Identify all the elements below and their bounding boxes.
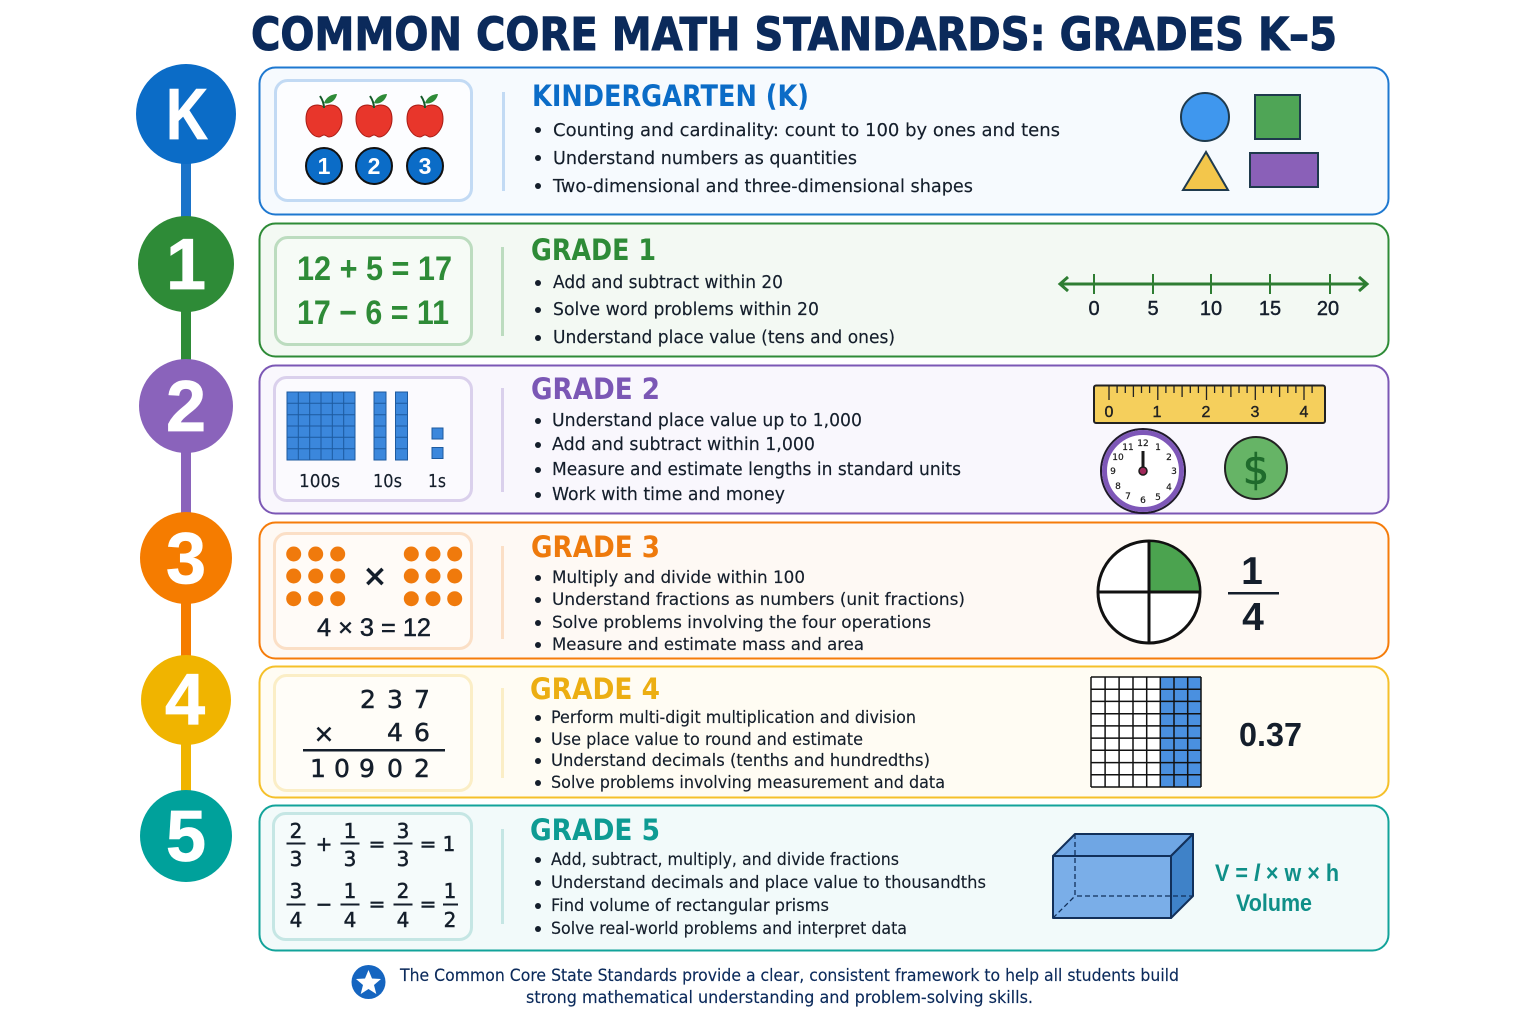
bullet list: Counting and cardinality: count to 100 by ones and tens: [553, 120, 1060, 141]
number line: [1060, 274, 1367, 320]
activity box: long multiplication: ×: [314, 719, 334, 748]
panel: kindergarten: [260, 68, 1388, 214]
activity box: fraction equations: =: [369, 832, 385, 856]
badge: 3: 3: [166, 519, 206, 599]
bullet list: Understand place value (tens and ones): [553, 327, 895, 348]
icon: ruler: 2: [1202, 404, 1211, 421]
badge: 1: 1: [166, 225, 206, 305]
badge: K: [136, 64, 236, 164]
activity box: long multiplication: 7: [414, 685, 430, 714]
activity box: fraction equations: =: [369, 892, 385, 916]
activity box: fraction equations: 1: [444, 879, 456, 903]
activity box: apples and counters: 2: [368, 153, 380, 179]
bullet list: Solve word problems within 20: [553, 299, 819, 320]
volume formula: V = l × w × h: [1215, 860, 1339, 887]
bullet list: Understand decimals and place value to thousandths: [551, 873, 986, 893]
activity box: arrays: [274, 534, 472, 648]
icon: clock: 8: [1115, 482, 1121, 492]
activity box: fraction equations: 3: [344, 847, 356, 871]
activity box: long multiplication: 9: [359, 754, 375, 783]
badge: 5: 5: [166, 797, 206, 877]
activity box: long multiplication: [274, 676, 472, 790]
icon: clock: 2: [1166, 453, 1172, 463]
badge: 2: [139, 359, 233, 453]
footer note: strong mathematical understanding and problem-solving skills.: [526, 988, 1033, 1008]
bullet list: Understand decimals (tenths and hundredths): [551, 751, 930, 771]
badge: K: K: [166, 75, 208, 155]
activity box: fraction equations: 3: [397, 847, 409, 871]
activity box: fraction equations: =: [420, 892, 436, 916]
activity box: long multiplication: 2: [360, 685, 376, 714]
panel: grade 1: [260, 224, 1388, 356]
decimal grid: [1091, 677, 1201, 787]
panel: grade 4: [260, 666, 1388, 798]
bullet list: [535, 410, 961, 505]
heading: GRADE 1: [531, 233, 656, 267]
icon: clock: 11: [1122, 443, 1134, 453]
bullet list: Use place value to round and estimate: [551, 730, 863, 750]
heading: GRADE 5: [530, 813, 660, 847]
bullet list: Solve problems involving the four operations: [552, 613, 931, 633]
icon: dollar coin: [1225, 437, 1287, 499]
heading: GRADE 2: [531, 372, 660, 406]
icon: clock: [1101, 429, 1185, 513]
fraction circle: [1098, 541, 1200, 643]
panel: grade 2: [260, 366, 1388, 514]
icon: dollar coin: $: [1243, 445, 1269, 494]
icon: clock: 12: [1137, 439, 1149, 449]
icon: clock: 5: [1155, 493, 1161, 503]
bullet list: Solve problems involving measurement and data: [551, 773, 945, 793]
panel: grade 3: [260, 522, 1388, 658]
bullet list: [535, 272, 895, 348]
icon: clock: 9: [1110, 467, 1116, 477]
bullet list: Add and subtract within 20: [553, 272, 783, 293]
number line: 5: [1147, 298, 1159, 320]
activity box: base ten blocks: [274, 378, 472, 500]
bullet list: [535, 850, 986, 939]
footer note: The Common Core State Standards provide a clear, consistent framework to help all students build: [399, 966, 1179, 986]
activity box: fraction equations: 2: [397, 879, 409, 903]
activity box: fraction equations: 3: [397, 819, 409, 843]
activity box: fraction equations: −: [316, 892, 332, 916]
badge: 4: [141, 655, 231, 745]
activity box: fraction equations: [274, 814, 472, 940]
number line: 0: [1088, 298, 1100, 320]
badge: 1: [138, 216, 234, 312]
icon: ruler: 4: [1300, 404, 1309, 421]
icon: star badge: [352, 965, 386, 999]
fraction: one quarter: 4: [1242, 596, 1264, 639]
badge: 3: [140, 512, 232, 604]
icon: ruler: 1: [1153, 404, 1162, 421]
bullet list: Understand fractions as numbers (unit fractions): [552, 590, 965, 610]
activity box: arrays: 4 × 3 = 12: [317, 614, 431, 642]
activity box: fraction equations: 2: [290, 819, 302, 843]
icon: clock: 10: [1112, 453, 1124, 463]
volume formula: [1215, 860, 1339, 917]
activity box: apples and counters: 1: [318, 153, 331, 179]
activity box: apples and counters: [276, 80, 472, 200]
activity box: long multiplication: 4: [387, 718, 403, 747]
bullet list: Multiply and divide within 100: [552, 568, 805, 588]
badge: 5: [140, 790, 232, 882]
icon: rectangular prism: [1053, 834, 1193, 918]
heading: GRADE 3: [531, 530, 660, 564]
bullet list: [535, 120, 1060, 197]
badge: 2: 2: [166, 367, 206, 447]
activity box: fraction equations: 3: [290, 879, 302, 903]
bullet list: Add, subtract, multiply, and divide fractions: [551, 850, 899, 870]
activity box: fraction equations: 2: [444, 908, 456, 932]
activity box: fraction equations: +: [316, 832, 332, 856]
number line: 10: [1200, 298, 1222, 320]
footer note: [399, 966, 1179, 1008]
activity box: fraction equations: 3: [290, 847, 302, 871]
bullet list: Understand place value up to 1,000: [552, 410, 862, 431]
activity box: fraction equations: 4: [344, 908, 356, 932]
bullet list: Solve real-world problems and interpret data: [551, 919, 907, 939]
activity box: fraction equations: 1: [344, 879, 356, 903]
activity box: long multiplication: 0: [387, 754, 403, 783]
bullet list: Add and subtract within 1,000: [552, 434, 815, 455]
bullet list: [535, 708, 945, 793]
bullet list: Work with time and money: [552, 484, 785, 505]
bullet list: Understand numbers as quantities: [553, 148, 857, 169]
activity box: fraction equations: 1: [443, 832, 455, 856]
fraction: one quarter: [1228, 550, 1279, 639]
decimal value: 0.37: [1239, 716, 1302, 753]
bullet list: Find volume of rectangular prisms: [551, 896, 829, 916]
bullet list: Measure and estimate lengths in standard units: [552, 459, 961, 480]
activity box: fraction equations: 1: [344, 819, 356, 843]
badge: 4: 4: [165, 660, 205, 740]
activity box: long multiplication: 6: [414, 718, 430, 747]
activity box: long multiplication: 1: [310, 754, 326, 783]
timeline connectors: [181, 160, 191, 796]
icon: clock: 1: [1155, 443, 1161, 453]
icon: ruler: 0: [1105, 404, 1114, 421]
activity box: long multiplication: 0: [334, 754, 350, 783]
title: COMMON CORE MATH STANDARDS: GRADES K–5: [251, 8, 1337, 61]
icon: clock: 6: [1140, 496, 1146, 506]
activity box: equations: [276, 238, 472, 344]
heading: KINDERGARTEN (K): [532, 79, 809, 113]
activity box: fraction equations: =: [420, 832, 436, 856]
activity box: base ten blocks: 10s: [373, 471, 402, 492]
number line: 15: [1259, 298, 1281, 320]
icon: clock: 4: [1166, 483, 1172, 493]
activity box: equations: 12 + 5 = 17: [297, 250, 452, 288]
volume formula: Volume: [1236, 890, 1312, 917]
activity box: base ten blocks: 1s: [428, 471, 446, 492]
bullet list: Measure and estimate mass and area: [552, 635, 864, 655]
bullet list: Two-dimensional and three-dimensional shapes: [552, 176, 973, 197]
activity box: arrays: ×: [362, 559, 388, 594]
bullet list: [535, 568, 965, 655]
activity box: fraction equations: 4: [290, 908, 302, 932]
panel: grade 5: [260, 806, 1388, 950]
icon: clock: 3: [1171, 467, 1177, 477]
icon: clock: 7: [1125, 492, 1131, 502]
heading: GRADE 4: [530, 672, 660, 706]
icon: shapes: [1181, 93, 1318, 190]
activity box: apples and counters: 3: [419, 153, 431, 179]
activity box: fraction equations: 4: [397, 908, 409, 932]
icon: ruler: 3: [1251, 404, 1260, 421]
activity box: long multiplication: 3: [387, 685, 403, 714]
activity box: long multiplication: 2: [414, 754, 430, 783]
activity box: equations: 17 − 6 = 11: [297, 294, 449, 332]
number line: 20: [1317, 298, 1339, 320]
fraction: one quarter: 1: [1241, 550, 1263, 593]
icon: ruler: [1094, 386, 1325, 423]
activity box: base ten blocks: 100s: [299, 471, 340, 492]
bullet list: Perform multi-digit multiplication and division: [551, 708, 916, 728]
